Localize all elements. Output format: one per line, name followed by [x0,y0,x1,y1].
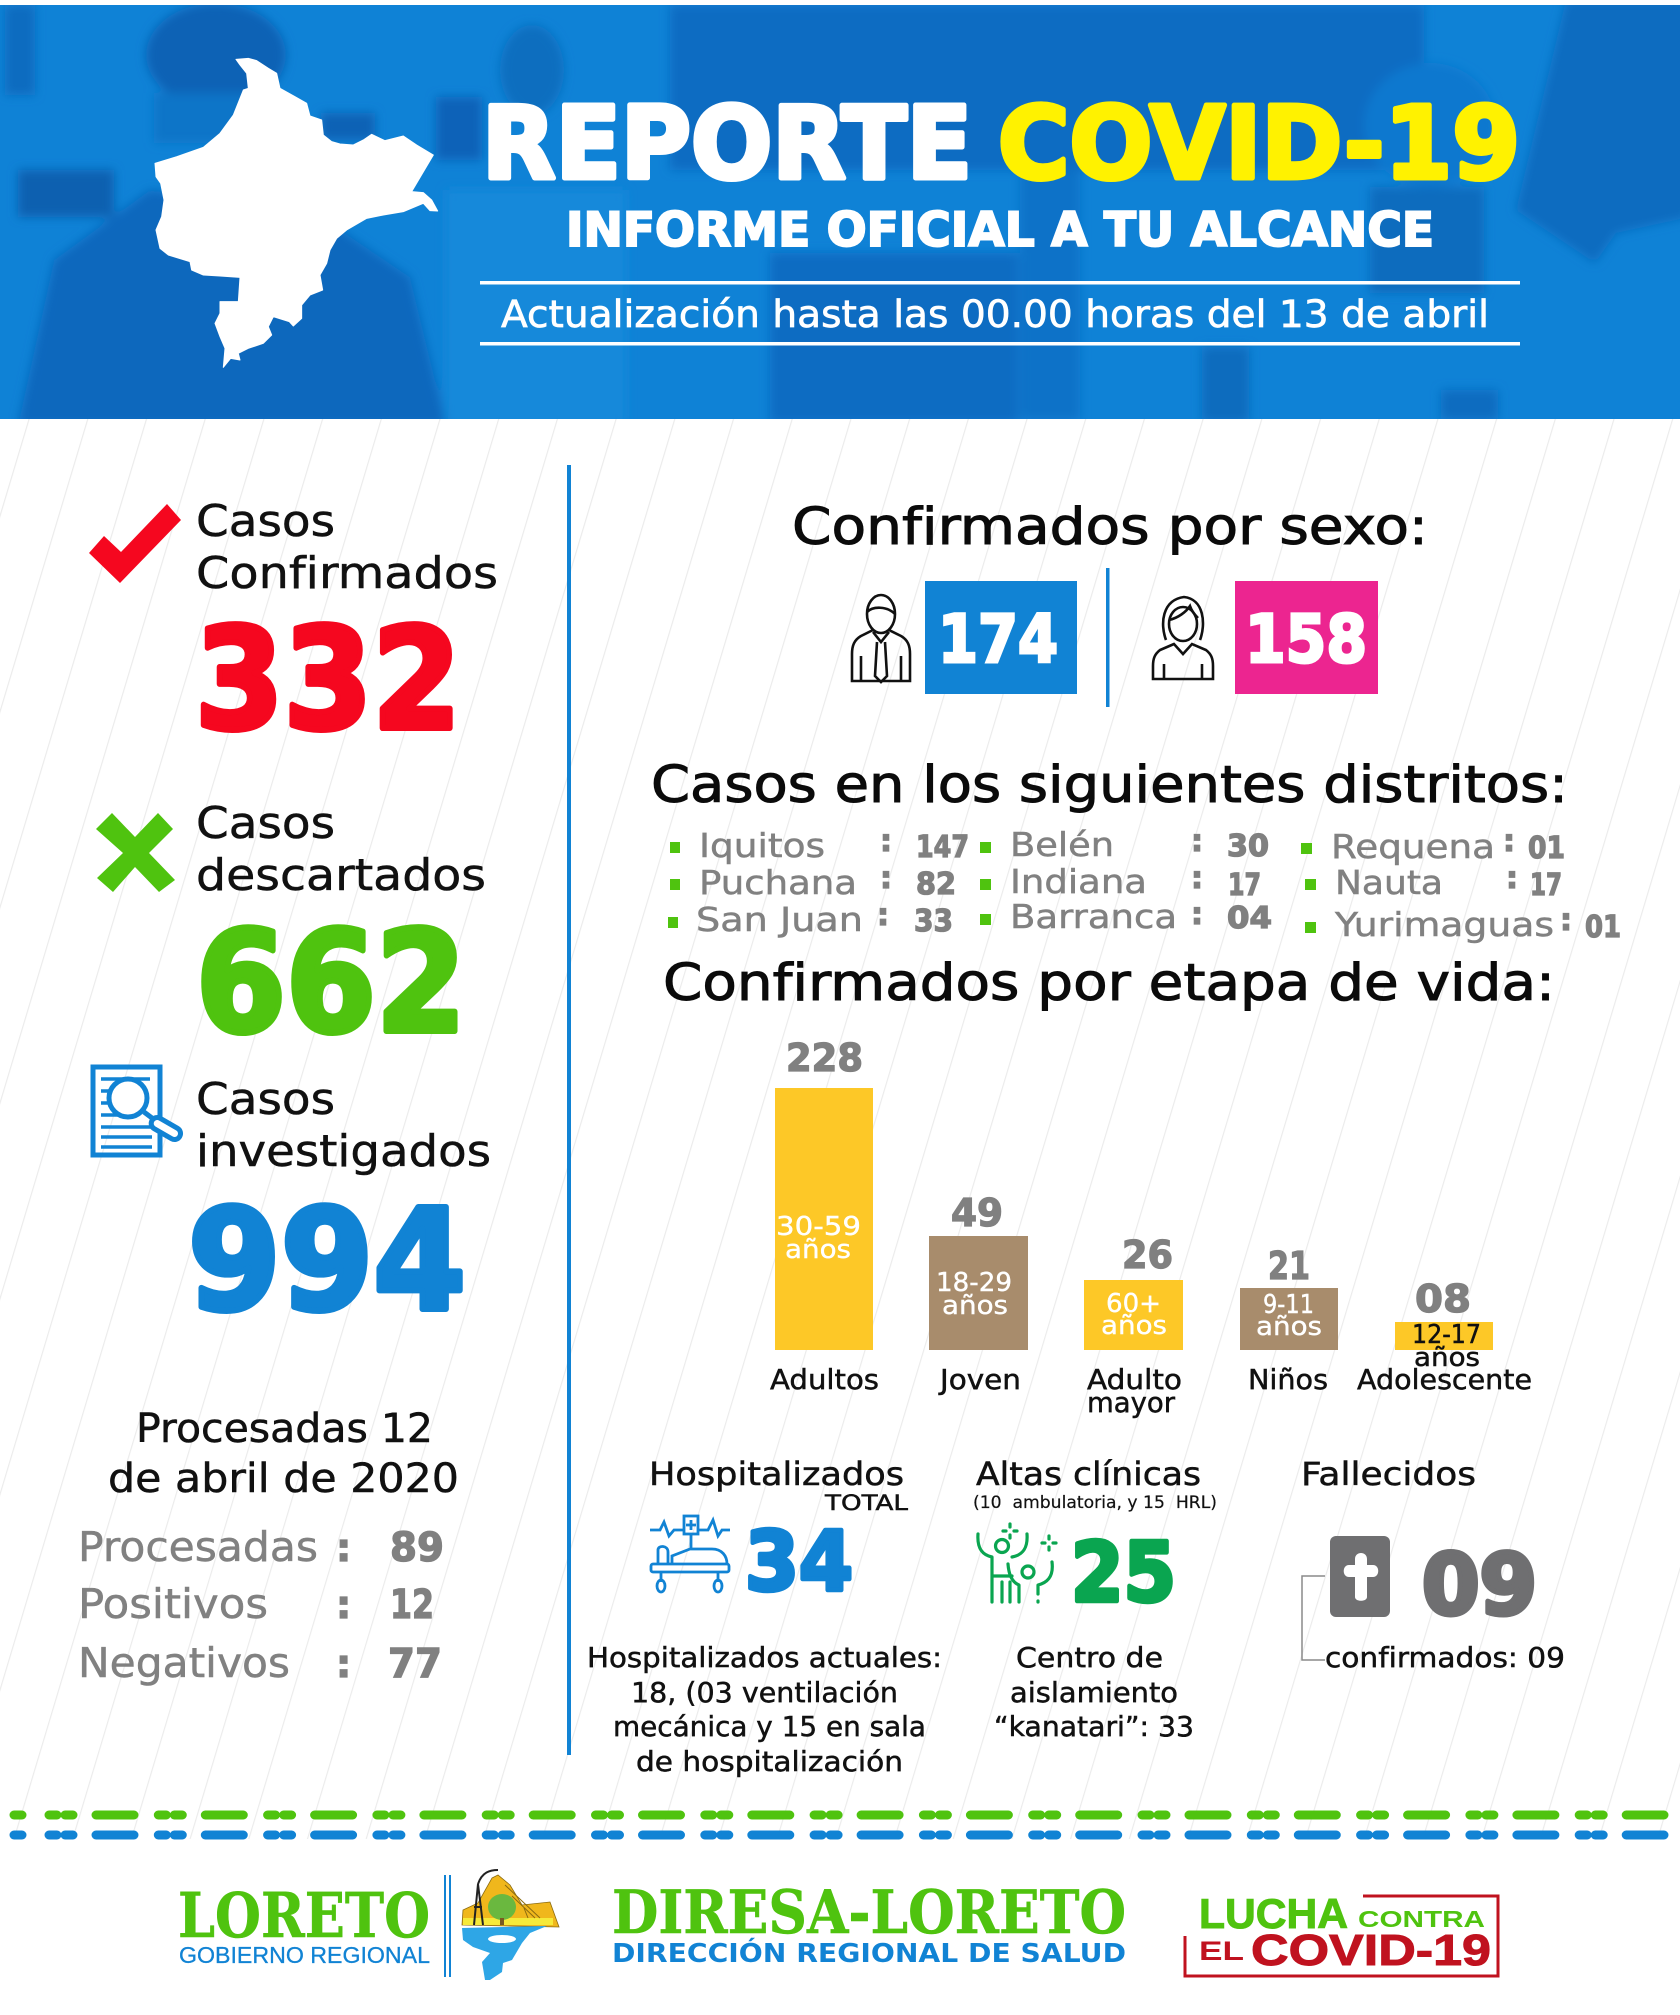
bar: joven 49: años [942,1291,1008,1321]
heading: procesadas: Procesadas 12 [136,1406,433,1452]
bar: adolescente 08: 12-17 [1412,1320,1481,1350]
heading: fallecidos: Fallecidos [1301,1455,1476,1493]
bar: joven 49: 18-29 [936,1268,1012,1298]
column: second districts: : [1191,861,1203,896]
text: centro de aislamiento: Centro de [1016,1641,1163,1674]
row: negativos: 77 [388,1641,442,1687]
column: third districts: : [1506,861,1518,896]
bar: adulto mayor 26 [1084,1233,1183,1419]
icon: Loreto shield map [462,1870,559,1980]
logo: Lucha contra el COVID-19: EL [1199,1936,1244,1966]
column: third districts [1301,824,1621,945]
icon: document with magnifier [93,1067,183,1155]
header banner [0,0,1680,425]
box: 174 men: 174 [938,601,1058,678]
bar: ninos 21: años [1256,1312,1322,1342]
bar: ninos 21: 21 [1268,1244,1310,1288]
panel: case totals: investigados [196,1126,491,1177]
row: positivos [78,1580,434,1628]
heading: confirmados por sexo: Confirmados por sexo: [792,498,1428,557]
logo: Gobierno Regional de Loreto: GOBIERNO REGIONAL [179,1942,430,1968]
box: 158 women [1235,581,1378,694]
row: negativos: Negativos [78,1639,290,1687]
panel: case totals [89,496,498,1343]
icon: red check [89,504,181,583]
row: procesadas: Procesadas [78,1523,318,1571]
logo: Gobierno Regional de Loreto [178,1870,559,1980]
column: second districts: : [1191,897,1203,932]
column: third districts: 17 [1530,868,1562,903]
column: first districts: Puchana [699,863,857,902]
bar: adultos 228: años [785,1235,851,1265]
row: positivos: 12 [390,1582,434,1628]
column: third districts: Nauta [1335,863,1443,902]
column: third districts: Yurimaguas [1334,905,1554,944]
panel: case totals: descartados [196,850,486,901]
column: second districts: 17 [1228,868,1261,903]
column: first districts [668,824,969,939]
title: COVID-19 [998,85,1520,202]
row: negativos: : [336,1642,351,1686]
bar: joven 49: Joven [938,1363,1021,1396]
text: centro de aislamiento: “kanatari”: 33 [994,1710,1194,1743]
panel: deaths [1301,1455,1565,1674]
box: 158 women: 158 [1245,601,1367,678]
bar: adolescente 08 [1357,1277,1532,1396]
logo: DIRESA-LORETO: DIRESA-LORETO [612,1878,1126,1948]
column: third districts: 01 [1528,831,1565,866]
panel: processed samples: de abril de 2020 [108,1456,459,1502]
bar: joven 49 [929,1191,1028,1396]
text: hospitalizados actuales: 18, (03 ventilación [631,1676,898,1709]
row: negativos [78,1639,442,1687]
logo: Gobierno Regional de Loreto: LORETO [178,1879,430,1952]
panel: clinical discharges [973,1455,1217,1743]
bar: adolescente 08: 08 [1415,1277,1471,1321]
bar: adulto mayor 26: Adulto [1087,1363,1182,1396]
icon: family celebrating [978,1524,1056,1602]
column: first districts: : [880,824,892,859]
label: casos investigados: Casos [196,1074,335,1125]
number: 25: 25 [1071,1526,1176,1621]
column: second districts: : [1191,824,1203,859]
panel: processed samples [78,1406,459,1687]
dashed separator lines [14,1815,1664,1835]
column: second districts: Belén [1010,825,1114,864]
label: casos confirmados: Casos [196,496,335,547]
panel: case totals: Confirmados [196,548,498,599]
bar: adulto mayor 26: 26 [1122,1233,1173,1277]
bar: adolescente 08: años [1414,1343,1480,1373]
column: third districts: : [1560,903,1572,938]
text: confirmados 09: confirmados: 09 [1325,1641,1565,1674]
column: first districts: : [877,898,889,933]
column: second districts [980,824,1272,936]
column: first districts: 82 [916,867,956,902]
panel: confirmed by sex [792,498,1428,707]
column: first districts: Iquitos [699,826,825,865]
text: centro de aislamiento: aislamiento [1010,1676,1178,1709]
logo: Lucha contra el COVID-19: LUCHA [1199,1890,1348,1937]
bar: adulto mayor 26: 60+ [1106,1289,1161,1319]
logo: Lucha contra el COVID-19: CONTRA [1358,1906,1485,1932]
logo: Lucha contra el COVID-19: COVID-19 [1251,1926,1491,1975]
text: hospitalizados actuales: mecánica y 15 en sala [613,1710,926,1743]
update date [480,281,1520,346]
icon: man [852,595,910,682]
panel: cases by district [651,756,1621,945]
logo: DIRESA-LORETO: DIRECCIÓN REGIONAL DE SALUD [612,1937,1126,1969]
text: hospitalizados actuales: Hospitalizados actuales: [587,1641,942,1674]
column: second districts: 30 [1227,829,1269,864]
heading: altas clinicas: Altas clínicas [976,1455,1201,1493]
number: 662: 662 [196,902,466,1065]
icon: Loreto region map [155,58,438,367]
icon: green cross [96,813,175,892]
logo: Lucha contra el COVID-19 [1185,1890,1498,1976]
row: positivos: Positivos [78,1580,268,1628]
bar: ninos 21: Niños [1248,1363,1328,1396]
bar: adulto mayor 26: años [1101,1311,1167,1341]
column: third districts: : [1503,824,1515,859]
text: hospitalizados actuales [587,1641,942,1778]
bar: joven 49: 49 [951,1191,1003,1235]
column: first districts: San Juan [696,900,863,939]
row: procesadas: 89 [390,1525,444,1571]
number: 09: 09 [1422,1536,1537,1634]
box: 174 men [925,581,1077,694]
bar: adulto mayor 26: mayor [1087,1386,1175,1419]
column: second districts: Indiana [1010,862,1147,901]
bar: adolescente 08: Adolescente [1357,1363,1532,1396]
heading: casos en distritos: Casos en los siguientes distritos: [651,756,1568,815]
column: second districts: Barranca [1010,897,1177,936]
number: 994: 994 [188,1180,466,1343]
title [482,85,1520,202]
update date: Actualización hasta las 00.00 horas del 13 de abril [501,293,1489,336]
icon: hospital bed [650,1516,730,1592]
heading: etapa de vida: Confirmados por etapa de vida: [663,954,1555,1013]
panel: hospitalized [587,1455,942,1778]
row: procesadas [78,1523,444,1571]
row: procesadas: : [336,1526,351,1570]
label: total: TOTAL [824,1491,908,1515]
label: casos descartados: Casos [196,798,335,849]
bar: ninos 21 [1240,1244,1338,1396]
column: third districts: Requena [1331,827,1495,866]
column: first districts: 33 [914,904,953,939]
icon: woman [1153,597,1213,679]
number: 34: 34 [745,1515,853,1610]
bar: adultos 228 [770,1036,879,1396]
subtitle: INFORME OFICIAL A TU ALCANCE [566,203,1434,258]
row: positivos: : [336,1583,351,1627]
text: centro de aislamiento [994,1641,1194,1743]
column: first districts: 147 [916,830,969,865]
bar: adultos 228: 228 [786,1036,863,1080]
number: 332: 332 [195,599,461,762]
bar: ninos 21: 9-11 [1263,1290,1314,1320]
title: REPORTE [482,85,972,202]
text: hospitalizados actuales: de hospitalización [636,1745,903,1778]
icon: cross tile [1330,1536,1390,1617]
column: first districts: : [880,861,892,896]
column: third districts: 01 [1585,910,1621,945]
heading: hospitalizados: Hospitalizados [649,1455,904,1493]
panel: confirmed by life stage [663,954,1555,1419]
note: ambulatoria y HRL: (10 ambulatoria, y 15 HRL) [973,1493,1217,1512]
bar: adultos 228: 30-59 [776,1212,861,1242]
column: second districts: 04 [1227,901,1272,936]
bar: adultos 228: Adultos [770,1363,879,1396]
